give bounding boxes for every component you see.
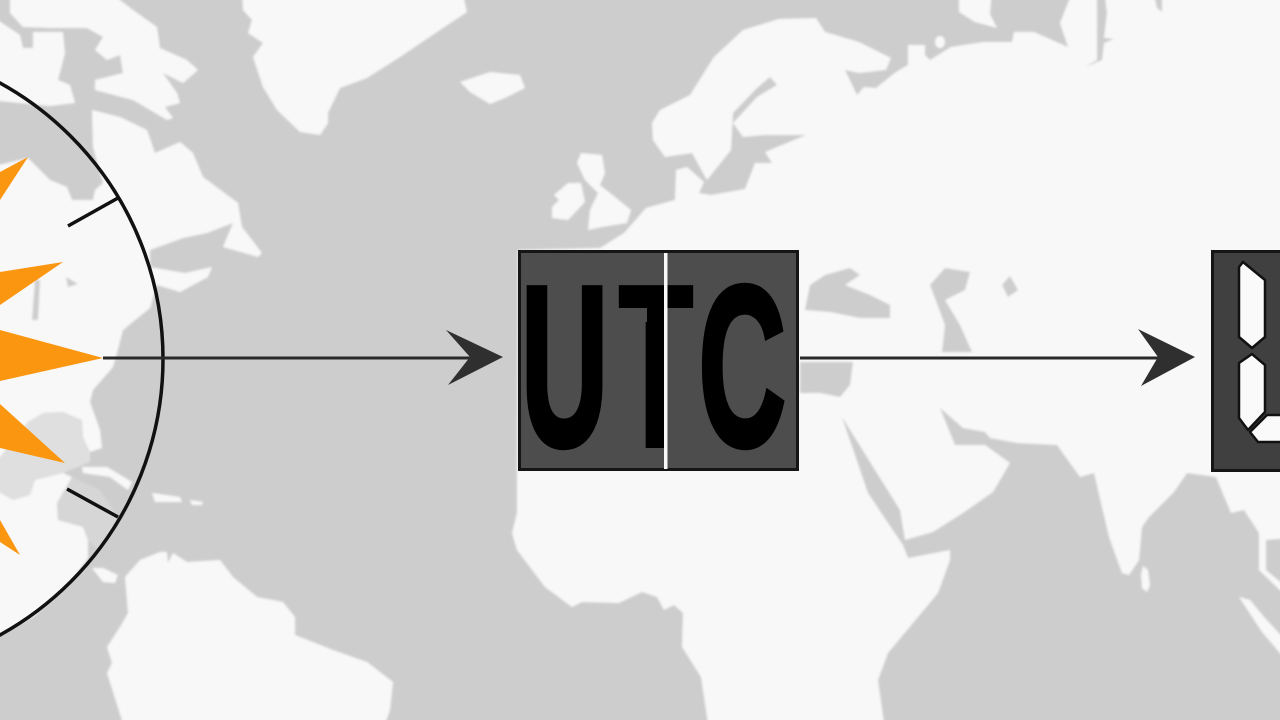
Sri Lanka: [1141, 566, 1150, 592]
Ireland: [552, 183, 585, 220]
Panama: [92, 568, 118, 583]
Cuba: [82, 467, 132, 490]
T crossbar trim: [612, 308, 647, 322]
Gulf of Thailand: [1266, 538, 1280, 590]
Caspian Sea: [930, 268, 972, 352]
Puerto Rico: [190, 500, 203, 505]
Gulf of Mexico: [0, 412, 90, 500]
Arctic archipelago, large island: [10, 0, 198, 120]
Aral Sea: [1002, 276, 1018, 297]
Caribbean inside dial: [57, 477, 118, 552]
eastern Mediterranean: [800, 362, 853, 397]
Lake Winnipeg: [32, 280, 40, 320]
Iceland: [460, 72, 525, 104]
UTC clock panel: [520, 239, 798, 494]
Eurasia and Africa: [512, 0, 1280, 720]
arc: [0, 44, 163, 674]
Black Sea: [805, 268, 890, 318]
UTC label: UTC: [521, 239, 786, 494]
local time digital display panel: [1212, 252, 1280, 470]
Mexico and Central America: [0, 473, 88, 640]
Arctic archipelago, western island: [0, 15, 75, 106]
upper tick: [68, 198, 118, 226]
arrow: UTC to local time: [800, 329, 1195, 386]
lower tick: [67, 489, 118, 517]
flip divider: [668, 320, 672, 468]
Great Britain: [577, 153, 631, 230]
Gulf of Ob: [1085, 0, 1114, 67]
small Arctic island: [935, 36, 945, 48]
North America mainland: [0, 110, 262, 470]
digit segments: [1239, 262, 1280, 442]
Greenland: [242, 0, 467, 135]
Hispaniola: [152, 493, 182, 502]
dial: sun position arc: [0, 44, 163, 674]
Lake Superior: [66, 277, 78, 287]
Gulf of Yenisei: [1153, 0, 1162, 12]
South America: [107, 552, 393, 720]
seas and inland water: [32, 0, 1280, 590]
Novaya Zemlya: [959, 0, 997, 28]
arrow: sun to UTC: [103, 330, 503, 385]
icon: sun rays: [0, 157, 103, 555]
Sumatra: [1239, 597, 1280, 665]
